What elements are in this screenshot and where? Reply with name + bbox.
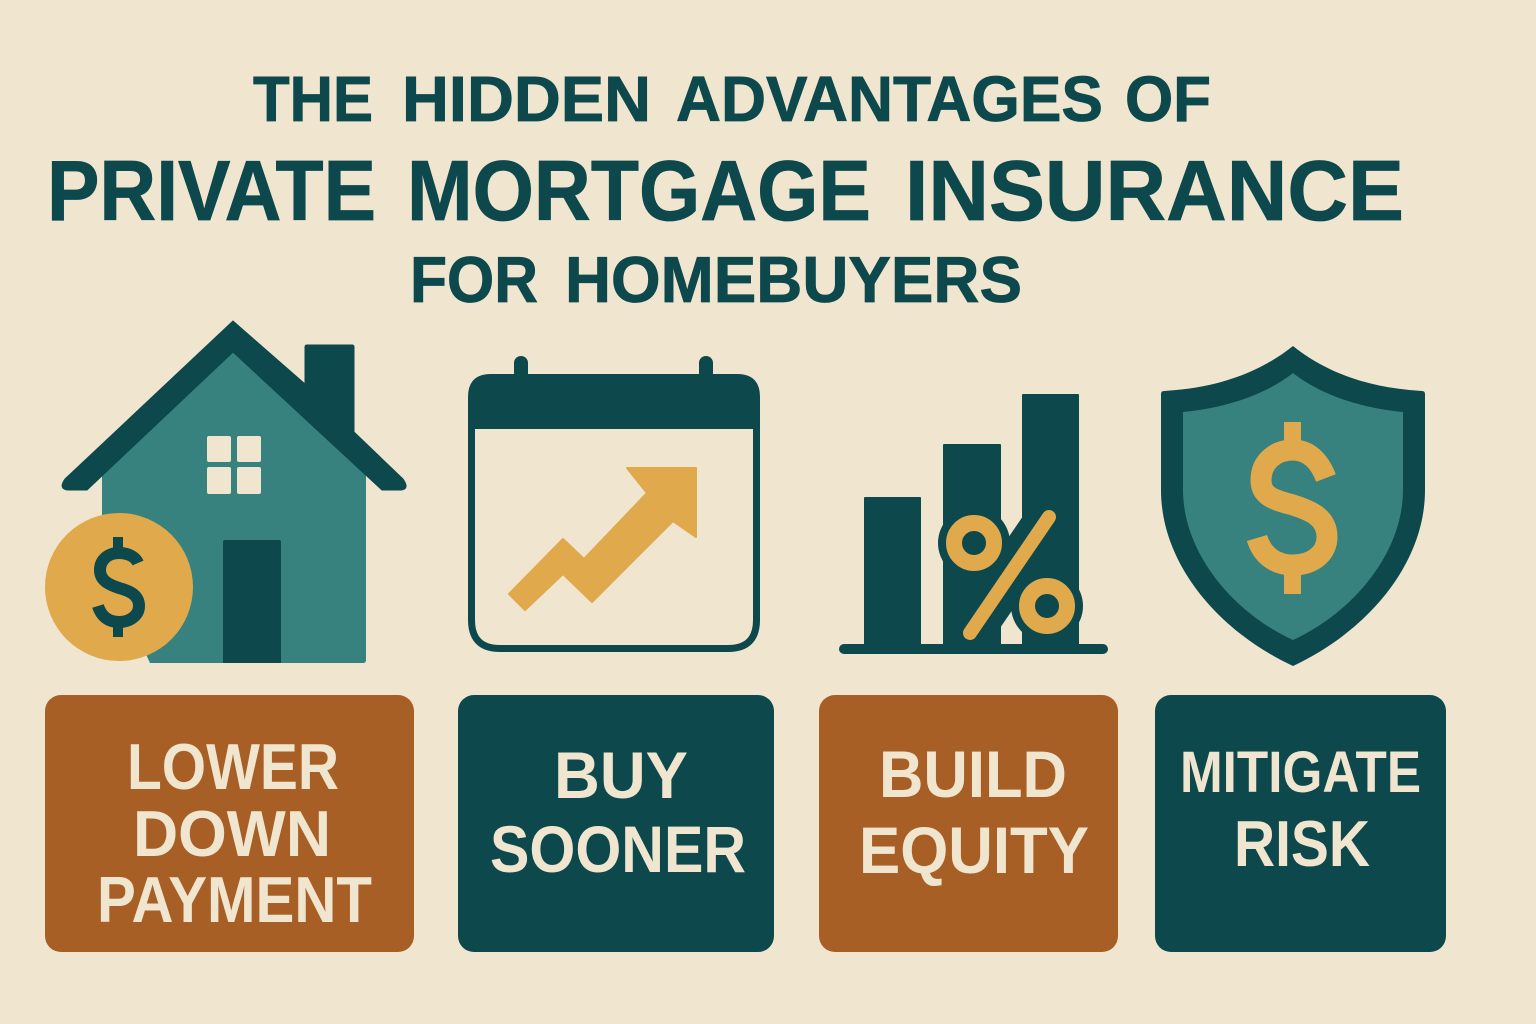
label: mitigate: MITIGATE — [1180, 740, 1421, 805]
bars — [839, 394, 1108, 654]
label: risk: RISK — [1234, 807, 1370, 880]
icon: bar chart with percent — [839, 394, 1108, 654]
title line 3: FOR — [410, 243, 538, 316]
icon: dollar symbol on shield — [1257, 422, 1327, 594]
label: down: DOWN — [133, 797, 331, 870]
title line 1 — [253, 63, 1211, 135]
title line 1: HIDDEN — [402, 63, 651, 135]
panel: build equity — [819, 695, 1118, 952]
title line 2 — [47, 144, 1404, 239]
icon: calendar with rising arrow — [468, 356, 760, 648]
house body — [102, 352, 366, 663]
label: payment: PAYMENT — [97, 863, 372, 936]
icon: dollar symbol on coin — [98, 537, 139, 637]
percent sign halo — [938, 507, 1083, 642]
label: equity: EQUITY — [859, 813, 1089, 887]
calendar rings — [514, 356, 713, 380]
title line 2: INSURANCE — [905, 144, 1404, 239]
title line 2: PRIVATE — [47, 144, 376, 239]
label: lower: LOWER — [127, 730, 339, 803]
label: buy: BUY — [554, 738, 688, 812]
icon: shield with dollar — [1161, 346, 1425, 666]
title line 1: ADVANTAGES — [676, 63, 1103, 135]
coin — [45, 513, 193, 661]
panel: buy sooner — [458, 695, 774, 952]
door — [223, 540, 281, 663]
calendar frame — [472, 420, 756, 648]
shield inner — [1183, 373, 1403, 640]
title line 1: THE — [253, 63, 373, 135]
title line 3: HOMEBUYERS — [565, 243, 1022, 316]
label: sooner: SOONER — [490, 812, 746, 886]
label: build: BUILD — [879, 737, 1067, 811]
panel: lower down payment — [45, 695, 414, 952]
shield outer — [1161, 346, 1425, 666]
percent sign — [954, 517, 1067, 633]
title — [47, 63, 1404, 316]
title line 2: MORTGAGE — [407, 144, 871, 239]
roof and chimney — [62, 321, 406, 490]
calendar header — [468, 374, 760, 429]
panel: mitigate risk — [1155, 695, 1446, 952]
window — [207, 436, 261, 494]
arrow — [509, 468, 696, 610]
title line 1: OF — [1125, 63, 1211, 135]
icon: house with coin — [45, 321, 406, 663]
